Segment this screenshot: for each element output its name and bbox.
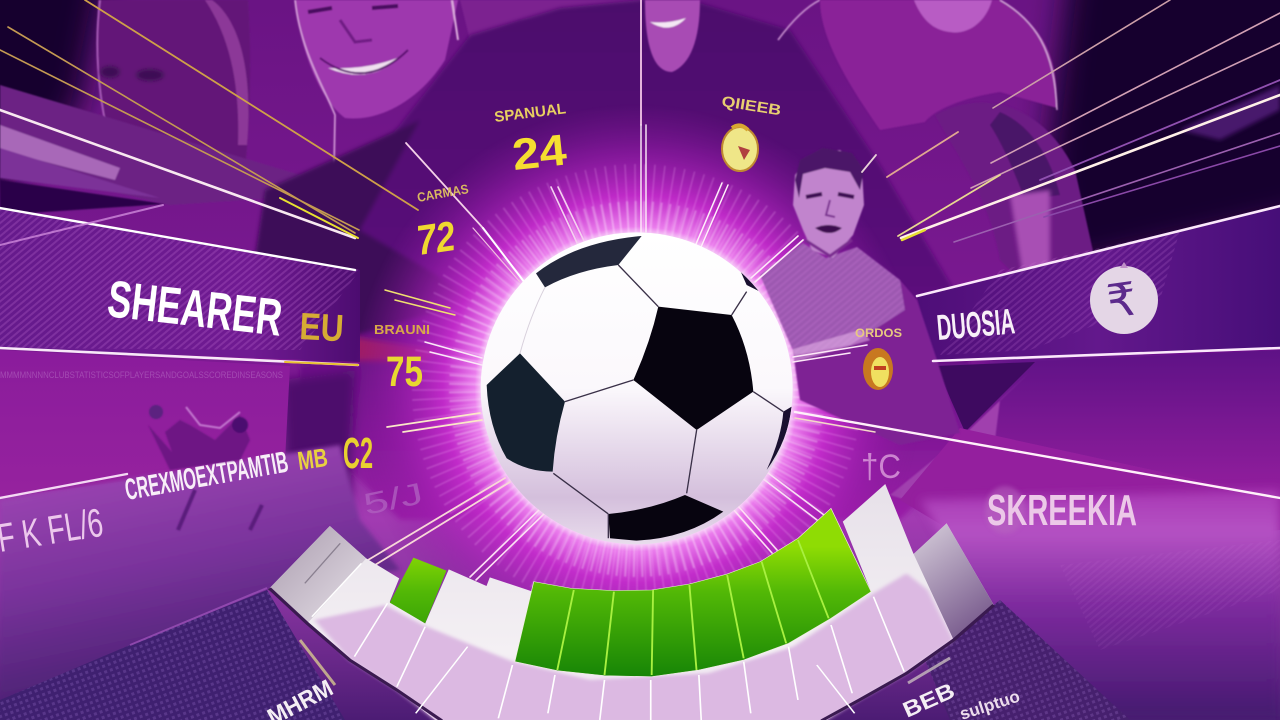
left striped banner <box>0 208 360 362</box>
black panel top <box>536 236 642 287</box>
left wedge highlights <box>0 85 320 215</box>
scribbles <box>361 448 901 522</box>
green bar separators <box>557 540 829 675</box>
silhouettes of players <box>148 405 262 530</box>
black panel slivers <box>740 270 792 470</box>
ball seams <box>553 265 783 538</box>
label: shearer: EU <box>299 306 345 350</box>
scribbles: 5/J <box>361 477 426 522</box>
stat: brauni 75 <box>374 322 430 396</box>
upper right player chest <box>820 0 1280 300</box>
bottom left turf <box>0 445 400 720</box>
bar arc chart <box>269 484 994 720</box>
white stepped bars <box>269 484 994 720</box>
label: shearer: SHEARER <box>105 270 285 348</box>
black panel bottom <box>608 495 723 541</box>
label: lower left strip: C2 <box>343 429 373 478</box>
stat: spanual 24 <box>493 100 569 180</box>
stat: spanual 24: 24 <box>510 126 569 180</box>
stat: brauni 75: BRAUNI <box>374 322 430 337</box>
green bars <box>515 508 871 677</box>
icon: rupee medallion <box>1090 262 1158 334</box>
panel below left banner: MMMMNNNNCLUBSTATISTICSOFPLAYERSANDGOALSSCOREDINSEASONS <box>0 370 283 380</box>
scribbles: †C <box>861 448 901 486</box>
lilac lower band <box>314 573 954 720</box>
ball glow <box>352 104 922 674</box>
stat: brauni 75: 75 <box>386 348 423 396</box>
label: skreekia <box>985 486 1137 535</box>
icon: rupee medallion: ₹ <box>1104 271 1140 329</box>
smiling player portrait <box>295 0 640 170</box>
stat: queeb crest <box>720 93 782 171</box>
black panel centre <box>633 307 753 430</box>
small green bar <box>390 558 446 623</box>
label: skreekia: SKREEKIA <box>987 486 1137 535</box>
label: lower left strip: MB <box>296 442 330 476</box>
white bar separators <box>312 563 904 720</box>
stat: carmas 72: 72 <box>414 212 458 264</box>
stat: queeb crest: QIIEEB <box>720 93 782 119</box>
bottom right turf <box>920 490 1280 720</box>
label: bottom right text <box>899 658 1022 720</box>
right striped banner <box>917 206 1280 362</box>
stat: ordos crest <box>855 326 902 390</box>
left player portrait <box>97 0 250 190</box>
central player portrait <box>760 148 960 445</box>
stat: ordos crest: ORDOS <box>855 326 902 340</box>
dark central jersey <box>250 0 980 520</box>
label: duosia: DUOSIA <box>935 300 1016 348</box>
label: lower left strip: CREXMOEXTPAMTIB <box>122 446 291 507</box>
stat: carmas 72: CARMAS <box>416 181 470 205</box>
football <box>481 232 793 544</box>
stat: spanual 24: SPANUAL <box>493 100 567 126</box>
stat: carmas 72 <box>414 181 470 264</box>
label: bottom left text <box>263 640 338 720</box>
panel below left banner <box>0 350 290 498</box>
panel below right banner <box>890 350 1280 560</box>
left grey bars <box>269 526 366 623</box>
chart outer rim <box>269 588 994 720</box>
black panel left <box>487 353 565 472</box>
right smiling face <box>645 0 820 72</box>
right grey bar <box>914 523 994 640</box>
